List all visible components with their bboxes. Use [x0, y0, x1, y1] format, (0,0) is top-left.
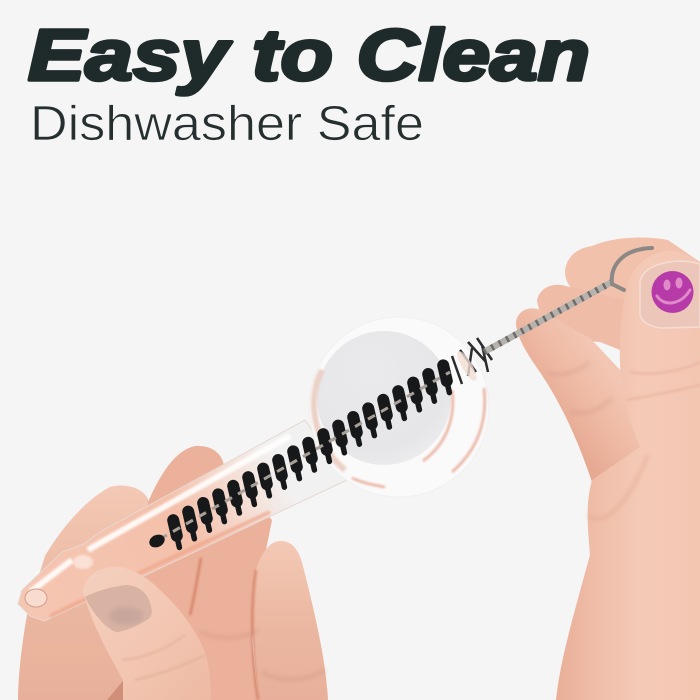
tube lower rim tint: [50, 512, 270, 616]
pink reflection arcs: [352, 388, 485, 487]
finger: index: [565, 238, 700, 310]
smiley right eye: [676, 278, 682, 288]
left thumb: [83, 567, 211, 700]
glass pipe: [18, 317, 489, 621]
wire shaft: [484, 282, 612, 352]
shadow behind thumb: [100, 620, 140, 700]
wire twist shading: [484, 282, 612, 352]
twisted wire handle: [484, 248, 652, 352]
tube highlights: [30, 436, 290, 592]
bristle clumps: [173, 365, 447, 536]
thumb and palm body: [556, 251, 700, 700]
thumb wrinkles: [626, 362, 700, 400]
twisted core wire: [160, 372, 450, 539]
subtitle: Dishwasher Safe: [30, 97, 424, 151]
smiley face: [652, 271, 694, 313]
right thumb and palm: [556, 251, 700, 700]
finger gap shadows: [190, 558, 258, 700]
thumbnail: [640, 261, 700, 328]
bowl halo: [309, 317, 489, 497]
thumbnail shade: [109, 607, 143, 625]
knuckle creases: [200, 630, 325, 679]
knuckle creases: [122, 635, 205, 680]
palm fold shadow: [588, 455, 648, 519]
thumbnail: [85, 585, 152, 632]
title: Easy to Clean: [28, 16, 590, 96]
end bristles at bowl mouth: [452, 338, 492, 384]
bristle tips: [175, 373, 449, 547]
tube body: [18, 420, 347, 621]
finger: ring: [516, 308, 645, 482]
glass neck spot: [454, 349, 480, 383]
finger: outer left: [18, 485, 190, 700]
finger crease shadows: [548, 362, 612, 413]
left hand back fingers: [18, 446, 328, 700]
finger: right: [253, 541, 328, 700]
right hand fingers: [516, 238, 700, 482]
thumb body: [83, 567, 211, 700]
wire hook: [612, 248, 652, 290]
finger: middle: [537, 285, 625, 352]
smiley mouth: [657, 290, 690, 303]
bowl inner sphere: [317, 331, 451, 465]
mouthpiece hole: [25, 589, 47, 607]
smiley nail sticker: [652, 271, 694, 313]
brush: [147, 338, 492, 550]
fingertip seen through glass: [73, 555, 93, 569]
finger: middle: [140, 446, 272, 700]
smiley left eye: [664, 280, 670, 290]
bowl neck rim: [314, 370, 345, 470]
brush tip ball: [147, 532, 167, 550]
